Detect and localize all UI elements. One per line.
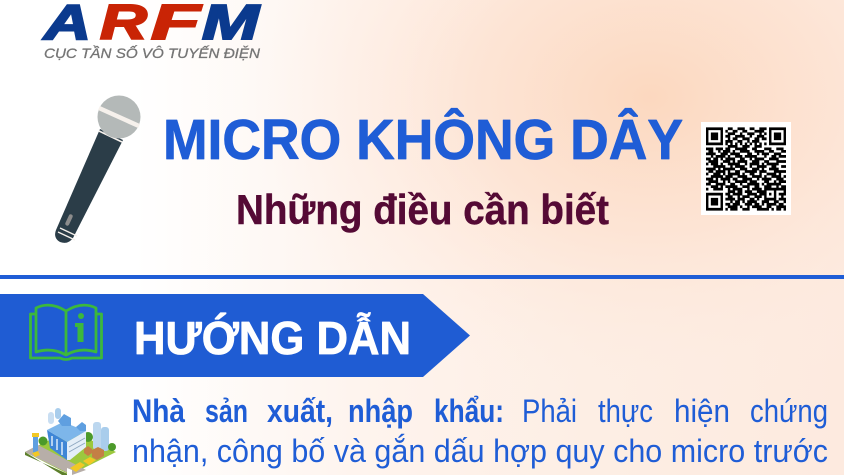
logo: ARFM: CỤC TẦN SỐ VÔ TUYẾN ĐIỆN	[44, 44, 261, 61]
body text: nhận, công bố và gắn dấu hợp quy cho micro trước	[132, 433, 828, 469]
body text: nhập	[348, 393, 413, 429]
body text	[132, 393, 828, 469]
section heading: HƯỚNG DẪN	[134, 312, 411, 364]
body text: sản	[205, 393, 248, 429]
subtitle: Những điều cần biết	[236, 186, 609, 233]
icon: microphone	[55, 96, 140, 243]
body text: Phải	[522, 393, 577, 429]
icon: factory building	[25, 408, 116, 475]
body text: xuất,	[267, 393, 333, 429]
body text: hiện	[674, 393, 730, 429]
logo: ARFM	[43, 0, 261, 61]
body text: thực	[598, 393, 653, 429]
icon: open book with info	[30, 305, 102, 360]
sub: tanks	[48, 412, 54, 424]
body text: chứng	[750, 393, 828, 429]
section banner: Hướng dẫn	[0, 294, 470, 377]
sub: crates and truck	[92, 447, 104, 460]
title: MICRO KHÔNG DÂY	[163, 107, 683, 172]
body text: Nhà	[132, 393, 185, 429]
header rule	[0, 275, 844, 279]
QR code	[701, 122, 791, 215]
sub: building	[47, 430, 67, 460]
body text: khẩu:	[434, 393, 504, 429]
